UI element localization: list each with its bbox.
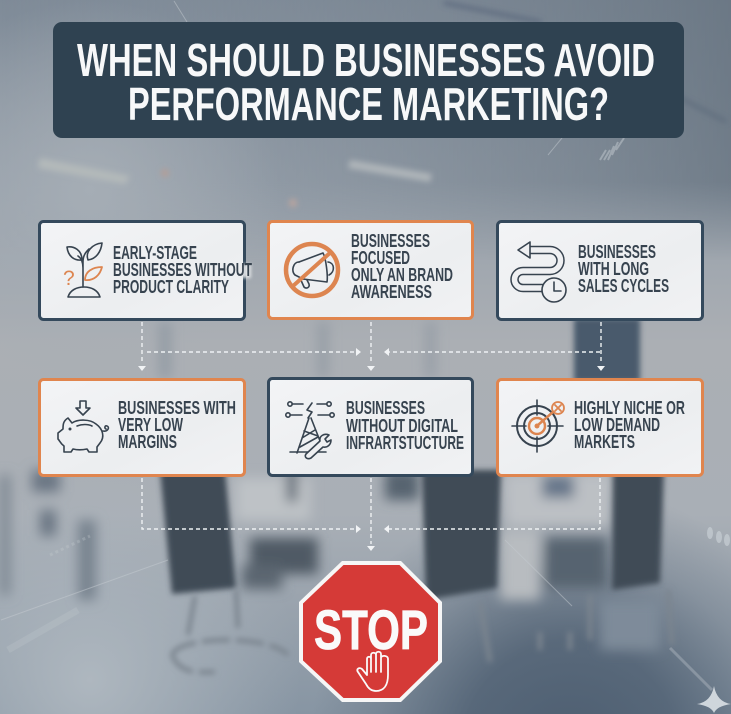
icon: winding arrow and clock [514,242,566,302]
icon: target with arrow [512,400,564,452]
text: very low margins: BUSINESSES WITH [118,398,236,418]
connectors: bottom row to stop sign [142,478,600,551]
text: long sales cycles [578,242,669,296]
text: early-stage: EARLY-STAGE [113,243,197,263]
icon: raised hand [357,652,388,691]
text: brand awareness [351,231,453,302]
text: very low margins: VERY LOW [118,415,183,435]
text: no digital infrastructure: INFRARTSTUCTURE [346,433,464,453]
panel: early-stage businesses [40,222,252,320]
panel: no digital infrastructure [268,378,472,476]
icon: crossed-out megaphone [286,244,338,296]
connectors: top row to bottom row [138,322,605,371]
title heading [77,34,655,130]
icon: sparkle watermark [697,686,731,713]
panel: brand awareness [268,222,472,318]
text: very low margins: MARGINS [118,432,177,452]
icon: signal tower and wrench [286,402,334,459]
text: no digital infrastructure: BUSINESSES [346,398,425,418]
panel: niche markets [498,380,702,476]
text: long sales cycles: WITH LONG [578,259,649,279]
icon: sprout with question mark [63,243,102,297]
text: no digital infrastructure [346,398,464,453]
text: niche markets: LOW DEMAND [574,415,660,435]
text: long sales cycles: SALES CYCLES [578,276,669,296]
icon: piggy bank with down arrow [58,401,108,452]
text: brand awareness: AWARENESS [351,282,432,302]
text: niche markets: HIGHLY NICHE OR [574,398,685,418]
text: early-stage: BUSINESSES WITHOUT [113,260,252,280]
text: no digital infrastructure: WITHOUT DIGITAL [346,416,458,436]
text: brand awareness: BUSINESSES [351,231,430,251]
panel: long sales cycles [498,222,702,320]
text: long sales cycles: BUSINESSES [578,242,656,262]
panel: very low margins [40,380,244,476]
text: early-stage [113,243,252,297]
text: brand awareness: ONLY AN BRAND [351,265,453,285]
text: very low margins [118,398,236,452]
text: niche markets: MARKETS [574,432,635,452]
title banner [53,22,684,138]
text: early-stage: PRODUCT CLARITY [113,277,229,297]
stop sign: STOP [314,598,428,661]
text: brand awareness: FOCUSED [351,248,410,268]
text: niche markets [574,398,685,452]
stop sign [299,561,442,702]
icon: sprout with question mark: ? [63,267,75,290]
